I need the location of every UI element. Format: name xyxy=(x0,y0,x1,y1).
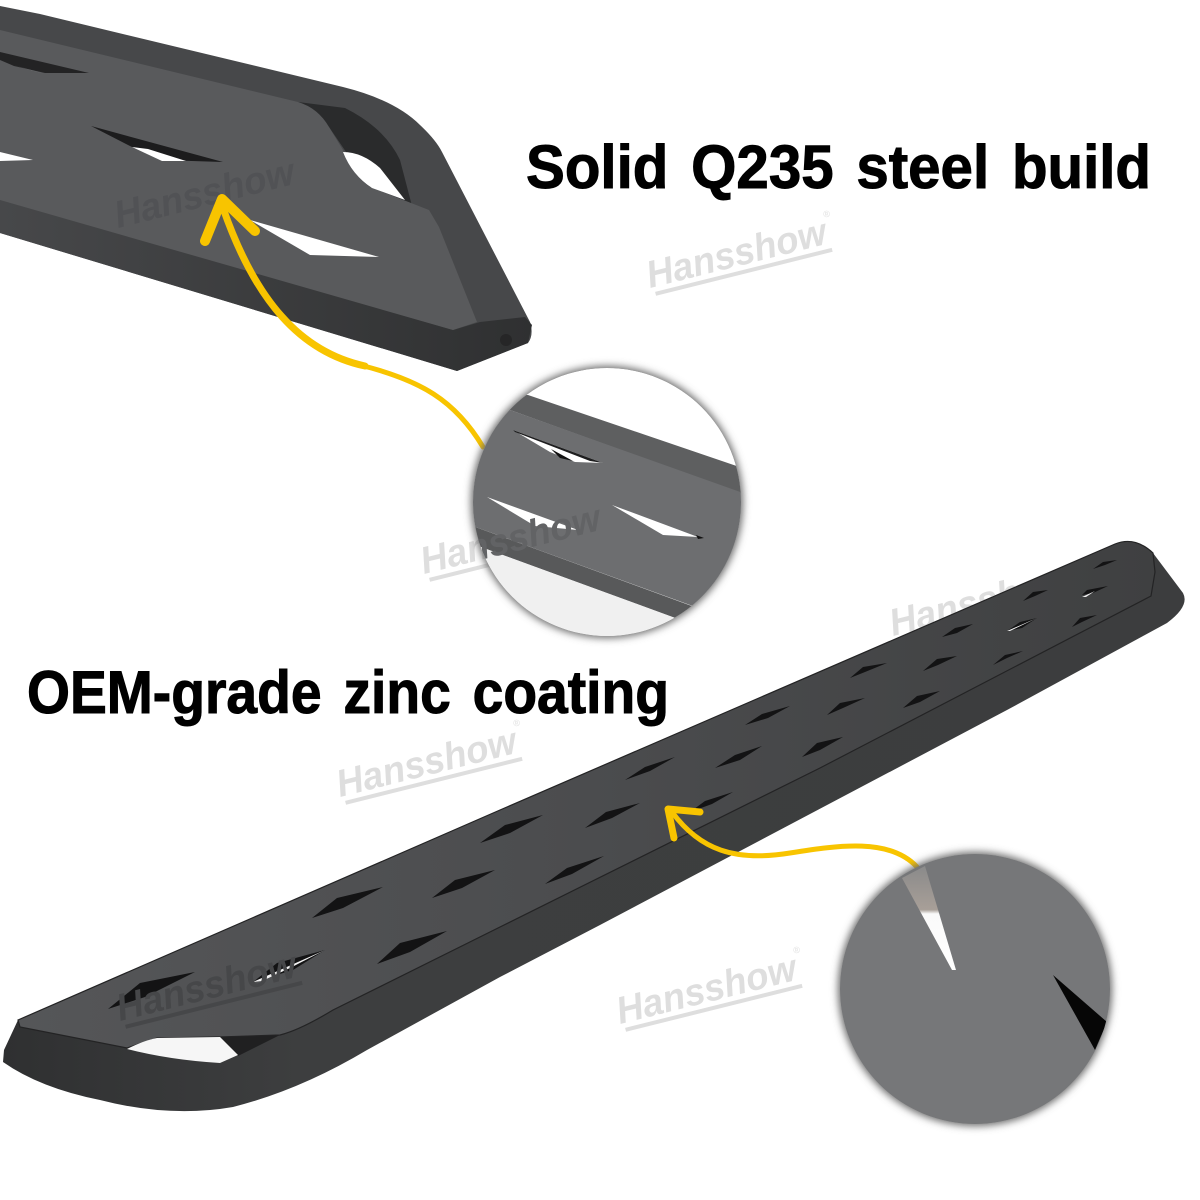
tube band xyxy=(510,395,741,493)
watermark: on top board: Hansshow xyxy=(110,151,301,237)
side band xyxy=(475,527,692,618)
tube outline xyxy=(0,6,532,371)
end cap dot xyxy=(500,334,512,346)
watermark: top centre: ® xyxy=(822,208,831,220)
slot two xyxy=(487,497,578,530)
side strip xyxy=(0,198,532,371)
slots xyxy=(108,560,1117,1009)
dark cavity xyxy=(220,1030,290,1056)
lower pale area xyxy=(480,547,674,636)
watermark: circle left, outside: Hansshow xyxy=(416,497,607,583)
slot glints xyxy=(253,950,325,982)
photo: top running board end xyxy=(0,6,532,371)
heading: solid steel build: Solid Q235 steel build xyxy=(526,133,1151,201)
watermark: on long board left: Hansshow xyxy=(112,944,303,1030)
watermark: behind long board right: Hansshow xyxy=(885,559,1076,645)
slot three xyxy=(612,505,698,537)
slot: fourth xyxy=(250,220,379,257)
watermark: mid left: Hansshow xyxy=(332,720,523,806)
hole: corner xyxy=(127,1037,238,1063)
arrow: yellow callout top xyxy=(205,199,483,447)
photo: long running board xyxy=(3,541,1185,1111)
slot one xyxy=(513,430,603,463)
circle shadow xyxy=(838,852,1112,1126)
plate xyxy=(18,541,1155,1048)
plate band xyxy=(473,410,741,606)
arrow: yellow callout bottom xyxy=(668,809,917,867)
plate xyxy=(0,30,477,330)
slot: second xyxy=(91,126,223,162)
watermark: mid left: ® xyxy=(512,717,521,729)
watermark inside circle: Hansshow xyxy=(416,497,607,583)
tube outline xyxy=(3,541,1185,1111)
circle shadow xyxy=(471,366,743,638)
slot: bright xyxy=(902,866,956,970)
inset circle: surface detail xyxy=(838,852,1112,1126)
inset circle: top detail xyxy=(465,360,749,644)
heading: zinc coating: OEM-grade zinc coating xyxy=(27,659,669,726)
hole: corner xyxy=(343,152,405,200)
slot: black xyxy=(1053,975,1107,1050)
watermark: bottom centre: Hansshow xyxy=(612,947,803,1033)
watermark: bottom centre: ® xyxy=(792,944,801,956)
slot: third xyxy=(0,152,33,161)
dark gap xyxy=(298,102,412,206)
watermark: top centre: Hansshow xyxy=(642,211,833,297)
slot: first xyxy=(0,52,89,73)
